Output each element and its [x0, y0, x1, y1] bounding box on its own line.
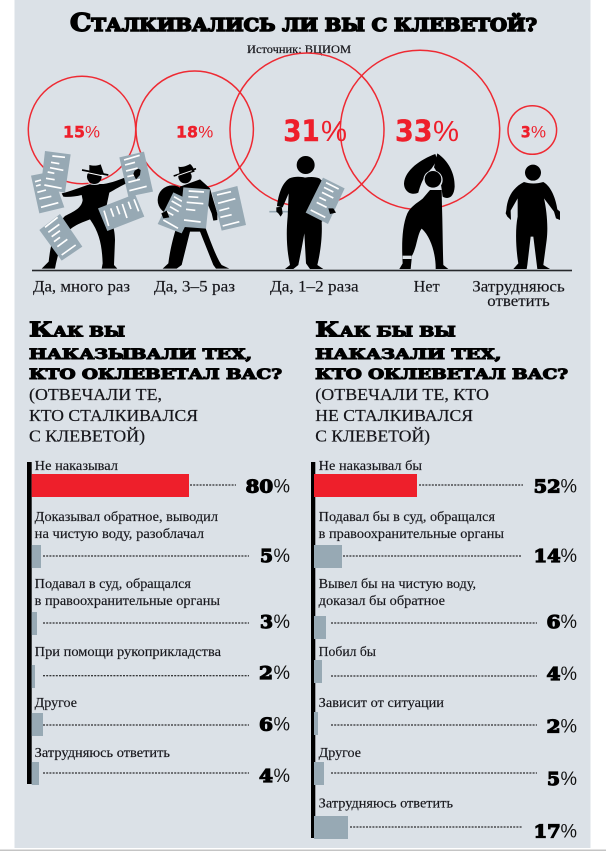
value: 18%: 18 [176, 123, 198, 142]
bar row: went to court 3%: 3 [260, 612, 273, 633]
value: 15% [63, 123, 100, 142]
panel: left heading: К АК ВЫ [29, 318, 125, 342]
bar row: would prove opposite 6%: 6 [546, 612, 560, 633]
bar row: hard to answer 4%: Затрудняюсь ответить [35, 745, 170, 760]
category label: hard to answer: Затрудняюсь [472, 279, 565, 296]
bar row: went to court 3%: Подавал в суд, обращался [35, 576, 191, 591]
bar row: not punished 80%: Не наказывал [35, 458, 118, 473]
circle chart: survey shares [28, 50, 557, 210]
bar row: proved opposite 5% [32, 509, 290, 568]
title: СТАЛКИВАЛИСЬ ЛИ ВЫ С КЛЕВЕТОЙ? [70, 8, 537, 37]
category label: many times: Да, много раз [33, 279, 130, 296]
bar row: other 6%: 6 [259, 715, 273, 736]
ground line [32, 270, 572, 271]
bar row: hard to answer 4%: % [274, 766, 290, 787]
bar row: assault 2% [32, 644, 290, 688]
value: 33%: 33 [395, 114, 432, 148]
value: 33%: % [433, 116, 459, 148]
bar row: other 6% [32, 695, 290, 736]
category label: hard to answer [472, 279, 565, 310]
bar row: hard to answer 17%: 17 [534, 822, 561, 843]
bar row: not punished 80% [32, 458, 290, 498]
bar row: proved opposite 5%: на чистую воду, разоблачал [35, 526, 204, 541]
value: 15%: % [85, 124, 100, 142]
bar row: other 5%: 5 [547, 769, 560, 790]
bar row: would not punish 52%: 52 [534, 477, 561, 498]
bar row: proved opposite 5%: % [274, 546, 290, 567]
bar row: would beat 4%: 4 [546, 664, 560, 685]
bar row: went to court 3%: в правоохранительные органы [35, 593, 220, 608]
panel: right heading: (ОТВЕЧАЛИ ТЕ, КТО [315, 385, 489, 404]
value: 3%: 3 [521, 123, 531, 142]
bar row: hard to answer 17%: Затрудняюсь ответить [319, 796, 453, 811]
bar row: would not punish 52%: Не наказывал бы [319, 458, 422, 473]
bar row: not punished 80%: 80 [246, 477, 273, 498]
bar row: hard to answer 4% [32, 745, 290, 787]
value: 31%: 31 [283, 114, 320, 148]
bar row: proved opposite 5%: Доказывал обратное, выводил [35, 509, 218, 524]
bar row: would not punish 52%: % [560, 477, 577, 498]
panel: left heading: КТО СТАЛКИВАЛСЯ [29, 406, 198, 425]
panel: right heading: КТО ОКЛЕВЕТАЛ ВАС? [315, 367, 568, 383]
icon: figure with hands on head [399, 153, 455, 269]
bar row: went to court 3%: % [274, 612, 290, 633]
bar row: other 6%: Другое [35, 695, 77, 710]
value: 31%: % [321, 116, 347, 148]
bar row: not punished 80%: % [274, 477, 290, 498]
value: 18% [176, 123, 214, 142]
value: 15%: 15 [63, 123, 85, 142]
value: 3% [521, 123, 546, 142]
bar row: other 5%: Другое [319, 745, 361, 760]
icon: figure with many papers [31, 151, 153, 269]
bar row: would prove opposite 6%: % [560, 612, 577, 633]
category label: 1-2 times: Да, 1–2 раза [270, 279, 359, 296]
bar row: would go to court 14%: в правоохранительные органы [319, 526, 504, 541]
bar chart: left [27, 458, 290, 787]
icon: figure holding paper and stick [269, 156, 345, 269]
bar row: other 5%: % [560, 769, 577, 790]
icon: figure with sack and papers [158, 164, 246, 269]
bar row: would prove opposite 6%: Вывел бы на чистую воду, [319, 576, 476, 591]
bar row: would beat 4%: Побил бы [319, 644, 376, 659]
bar row: assault 2%: 2 [259, 663, 273, 684]
value: 31% [283, 114, 347, 148]
icon: figure standing undecided [506, 165, 560, 269]
panel: right heading [315, 318, 568, 446]
value: 3%: % [531, 124, 546, 142]
panel: left heading [29, 318, 282, 446]
panel: left heading: НАКАЗЫВАЛИ ТЕХ, [29, 347, 252, 363]
bar row: hard to answer 17%: % [560, 822, 577, 843]
bar row: assault 2%: % [274, 663, 290, 684]
source note: Источник: ВЦИОМ [247, 42, 351, 56]
bar row: proved opposite 5%: 5 [260, 546, 273, 567]
bar row: went to court 3% [32, 576, 290, 635]
bar row: other 6%: % [274, 715, 290, 736]
category label: no: Нет [414, 279, 440, 296]
panel: right heading: К АК БЫ ВЫ [315, 318, 456, 342]
panel: left heading: КТО ОКЛЕВЕТАЛ ВАС? [29, 367, 282, 383]
category label: hard to answer: ответить [487, 293, 550, 310]
bar row: would go to court 14%: % [560, 546, 577, 567]
bar row: would prove opposite 6%: доказал бы обратное [319, 593, 445, 608]
bar row: would go to court 14%: 14 [534, 546, 561, 567]
bar row: other 5% [314, 745, 577, 790]
bar row: would not punish 52% [314, 458, 577, 498]
value: 18%: % [198, 124, 214, 142]
panel: left heading: С КЛЕВЕТОЙ) [29, 427, 145, 446]
bar row: depends 2%: % [560, 717, 577, 738]
panel: left heading: (ОТВЕЧАЛИ ТЕ, [29, 385, 162, 404]
bar row: hard to answer 17% [314, 796, 577, 843]
panel: right heading: НЕ СТАЛКИВАЛСЯ [315, 406, 473, 425]
value: 33% [395, 114, 459, 148]
bar row: would go to court 14% [314, 509, 577, 568]
bar row: assault 2%: При помощи рукоприкладства [35, 644, 221, 659]
panel: right heading: НАКАЗАЛИ ТЕХ, [315, 347, 501, 363]
bar row: depends 2%: 2 [546, 717, 560, 738]
bar row: would go to court 14%: Подавал бы в суд, обращался [319, 509, 495, 524]
bar row: would beat 4%: % [560, 664, 577, 685]
bar chart: right [311, 458, 577, 843]
bar row: depends 2% [314, 695, 577, 738]
bar row: would prove opposite 6% [314, 576, 577, 639]
panel: right heading: С КЛЕВЕТОЙ) [315, 427, 430, 446]
bar row: hard to answer 4%: 4 [259, 766, 273, 787]
bar row: depends 2%: Зависит от ситуации [319, 695, 444, 710]
category label: 3-5 times: Да, 3–5 раз [154, 279, 235, 296]
bar row: would beat 4% [314, 644, 577, 685]
